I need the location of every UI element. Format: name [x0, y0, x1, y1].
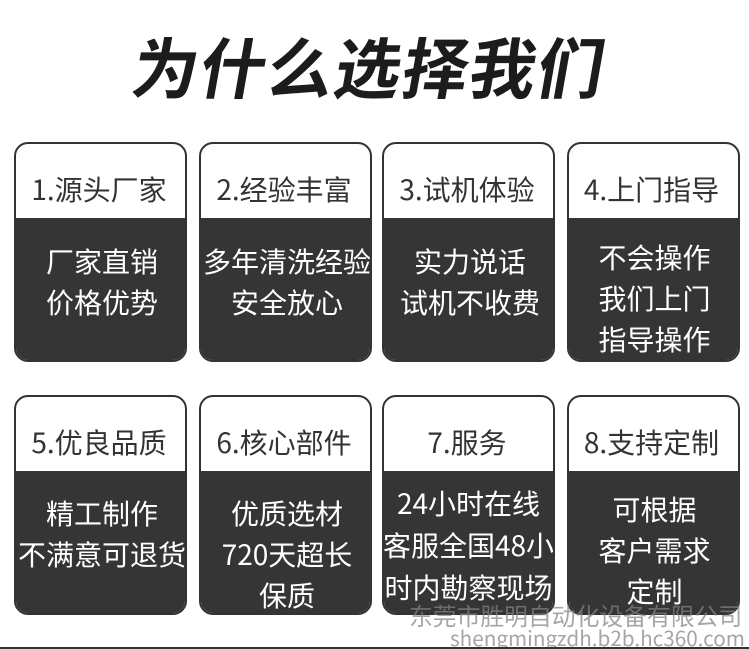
bottom rule — [0, 647, 749, 649]
text block: card 6: 优质选材 — [231, 493, 343, 533]
text block: card 7: 24小时在线 — [397, 483, 540, 523]
text block: card 2: 多年清洗经验 — [203, 241, 371, 281]
text block: card 2 — [201, 218, 370, 360]
text block: card 3 — [384, 218, 553, 360]
text block: card 6: 保质 — [259, 575, 315, 615]
text block: card 6 — [201, 471, 370, 613]
text block: card 8: 可根据 — [612, 489, 696, 529]
panel: card 3 — [382, 142, 555, 362]
heading: card 8: 8.支持定制 — [584, 422, 719, 462]
text block: card 8 — [568, 471, 738, 613]
text block: card 1: 厂家直销 — [46, 241, 158, 281]
text block: card 5: 精工制作 — [46, 493, 158, 533]
text block: card 7: 时内勘察现场 — [384, 567, 552, 607]
text block: card 8: 定制 — [626, 571, 682, 611]
text block: card 6: 720天超长 — [222, 534, 352, 574]
text block: card 8: 客户需求 — [598, 530, 710, 570]
panel: card 7 — [382, 395, 555, 615]
text block: card 4 — [568, 218, 738, 360]
heading: card 2: 2.经验丰富 — [216, 169, 352, 209]
panel: card 4 — [566, 142, 740, 362]
panel: card 5 — [14, 395, 187, 615]
text block: card 3: 试机不收费 — [400, 282, 540, 322]
heading: card 5: 5.优良品质 — [31, 422, 167, 462]
text block: card 4: 指导操作 — [598, 319, 710, 359]
heading: card 4: 4.上门指导 — [584, 169, 719, 209]
text block: card 2: 安全放心 — [231, 282, 343, 322]
text block: card 1: 价格优势 — [46, 282, 158, 322]
heading: card 6: 6.核心部件 — [216, 422, 352, 462]
text block: card 5 — [16, 471, 185, 613]
text block: card 1 — [16, 218, 185, 360]
panel: card 6 — [199, 395, 372, 615]
text block: card 4: 我们上门 — [598, 278, 710, 318]
text block: card 7: 客服全国48小 — [383, 525, 554, 565]
watermark: company name: 东莞市胜明自动化设备有限公司 — [409, 597, 742, 632]
heading: card 3: 3.试机体验 — [399, 169, 535, 209]
text block: card 7 — [384, 471, 553, 613]
heading: card 7: 7.服务 — [427, 422, 507, 462]
text block: card 4: 不会操作 — [598, 237, 710, 277]
panel: card 2 — [199, 142, 372, 362]
text block: card 5: 不满意可退货 — [18, 534, 186, 574]
heading: card 1: 1.源头厂家 — [31, 169, 167, 209]
title: 为什么选择我们 — [125, 17, 615, 113]
panel: card 8 — [566, 395, 740, 615]
text block: card 3: 实力说话 — [414, 241, 526, 281]
panel: card 1 — [14, 142, 187, 362]
